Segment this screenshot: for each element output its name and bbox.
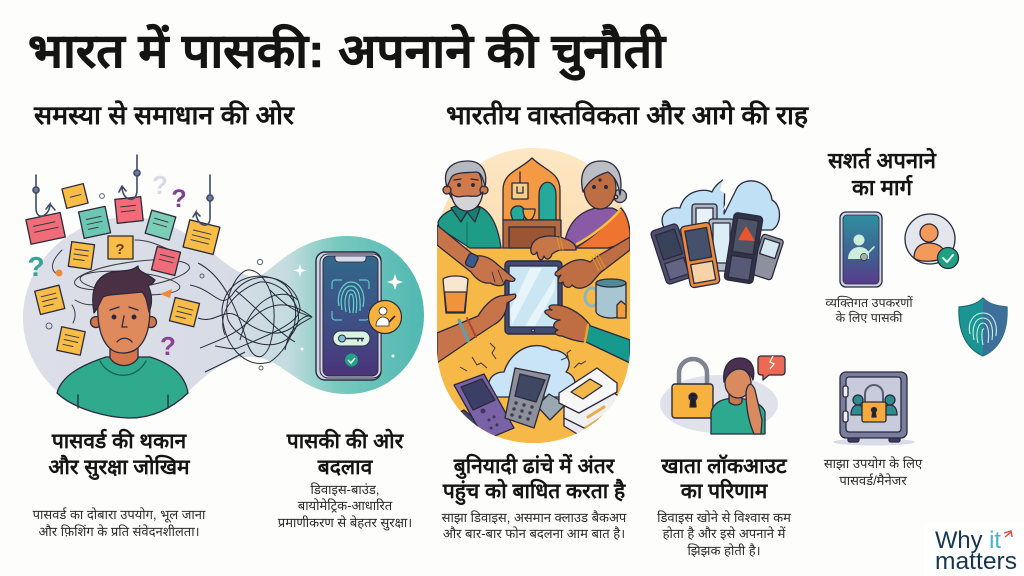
block: account lockout: डिवाइस खोने से विश्वास कम [657, 510, 791, 525]
woman [564, 161, 630, 248]
fingerprint [332, 280, 369, 320]
tablet [505, 261, 562, 334]
block: shift to passkey: प्रमाणीकरण से बेहतर सुरक्षा। [278, 515, 412, 531]
block: infrastructure gaps [442, 453, 627, 541]
label: personal devices: के लिए पासकी [836, 310, 903, 325]
broken heart bubble [758, 356, 785, 380]
title: भारत में पासकी: अपनाने की चुनौती [28, 24, 667, 81]
oval background [437, 148, 630, 443]
illustration: account lockout person [660, 356, 785, 434]
illustration: shared device oval [437, 148, 630, 448]
logo: Why it matters: matters [935, 548, 1017, 575]
note: yellow top [62, 184, 88, 208]
note: yellow lower left [57, 327, 85, 355]
neck [110, 345, 138, 366]
block: password fatigue [33, 428, 206, 539]
phones [650, 204, 784, 288]
block: account lockout [657, 454, 791, 558]
block: shift to passkey: डिवाइस-बाउंड, [311, 482, 379, 497]
arm: lower right [545, 305, 590, 342]
block: shift to passkey: पासकी की ओर [286, 428, 405, 453]
heading: conditional adoption path [827, 147, 937, 200]
table edges [502, 248, 503, 249]
swirl around head [52, 240, 191, 323]
face [98, 292, 150, 353]
block: shift to passkey: बायोमेट्रिक-आधारित [298, 498, 393, 513]
note: yellow right lower [169, 297, 200, 327]
arm: top right [555, 237, 630, 288]
check [345, 354, 358, 366]
sparkles [294, 264, 403, 290]
heading: Indian reality: भारतीय वास्तविकता और आगे की राह [446, 100, 809, 130]
note: teal right [145, 210, 176, 240]
person [711, 358, 765, 434]
question marks: ? [115, 241, 125, 258]
blob background [23, 217, 424, 418]
note: pink middle [151, 246, 181, 276]
block: shift to passkey: बदलाव [317, 456, 374, 479]
block: password fatigue: पासवर्ड का दोबारा उपयोग, भूल जाना [33, 507, 206, 523]
shirt [57, 357, 188, 418]
key pill [333, 331, 370, 346]
ears [90, 316, 102, 328]
block: shift to passkey [278, 428, 412, 531]
note: yellow question [108, 236, 133, 259]
block: infrastructure gaps: साझा डिवाइस, असमान क्लाउड बैकअप [442, 510, 627, 525]
block: account lockout: खाता लॉकआउट [660, 454, 788, 478]
question marks: ? [160, 331, 176, 361]
note: yellow left [68, 242, 95, 270]
cloud [662, 177, 780, 230]
note: pink centre top [115, 197, 143, 223]
heading: problem to solution: समस्या से समाधान की ओर [33, 100, 295, 130]
glass [443, 276, 468, 313]
arm: lower left [437, 294, 516, 363]
note: yellow right hooked [183, 220, 220, 254]
note: yellow far left [35, 285, 65, 315]
question marks [27, 170, 187, 361]
block: infrastructure gaps: पहुंच को बाधित करता है [442, 478, 626, 506]
hands [437, 225, 630, 363]
illustration: broken cloud and phones [650, 172, 784, 288]
badge [368, 300, 402, 334]
flat phones [460, 393, 564, 426]
icon: phone with passkey user [840, 212, 882, 287]
block: account lockout: झिझक होती है। [687, 543, 761, 558]
feature phone: purple [454, 374, 514, 440]
label: shared use [824, 456, 923, 488]
block: password fatigue: और फ़िशिंग के प्रति संवेदनशीलता। [38, 524, 200, 539]
alcove with shelf [503, 158, 561, 248]
tea mug [585, 279, 626, 318]
hair [93, 266, 155, 313]
question marks: ? [171, 185, 187, 213]
face features [110, 307, 138, 342]
icon: shared safe [833, 372, 915, 446]
table [437, 248, 630, 448]
padlock [672, 359, 713, 418]
arm: centre top [531, 236, 576, 260]
question marks: ? [27, 251, 45, 282]
SIM cards [559, 368, 620, 438]
arm: top left pointing [437, 225, 515, 286]
note: pink hooked [26, 213, 65, 244]
heading: conditional adoption path: का मार्ग [851, 174, 914, 200]
sticky notes [26, 184, 220, 355]
block: password fatigue: पासवर्ड की थकान [51, 428, 188, 453]
block: infrastructure gaps: और बार-बार फोन बदलना आम बात है। [443, 526, 625, 541]
label: personal devices: व्यक्तिगत उपकरणों [825, 295, 913, 310]
label: shared use: पासवर्ड/मैनेजर [839, 473, 907, 488]
specks [46, 194, 263, 370]
person [57, 266, 188, 418]
cloud [488, 346, 575, 397]
label: personal devices [825, 295, 913, 325]
tangled lines [190, 263, 312, 372]
label: shared use: साझा उपयोग के लिए [824, 456, 923, 471]
block: password fatigue: और सुरक्षा जोखिम [48, 454, 191, 481]
phone with passkey [294, 252, 403, 380]
icon: fingerprint shield [959, 298, 1007, 356]
block: infrastructure gaps: बुनियादी ढांचे में अंतर [453, 453, 616, 480]
block: account lockout: होता है और इसे अपनाने में [663, 526, 786, 541]
question marks: ? [152, 170, 168, 200]
icon: verified user [905, 214, 958, 268]
fishing hooks [33, 155, 213, 225]
broken signal marks [460, 343, 586, 371]
note: teal [79, 206, 111, 238]
crack [720, 172, 737, 213]
logo: Why it matters: Why it [935, 527, 1001, 554]
feature phone: grey [505, 368, 550, 428]
block: account lockout: का परिणाम [680, 478, 769, 503]
illustration: password fatigue to passkey blob [23, 155, 424, 418]
logo: Why it matters [924, 522, 1024, 576]
man [438, 161, 501, 248]
heading: conditional adoption path: सशर्त अपनाने [827, 147, 937, 173]
phone body [316, 252, 381, 380]
ellipse background [660, 375, 778, 433]
